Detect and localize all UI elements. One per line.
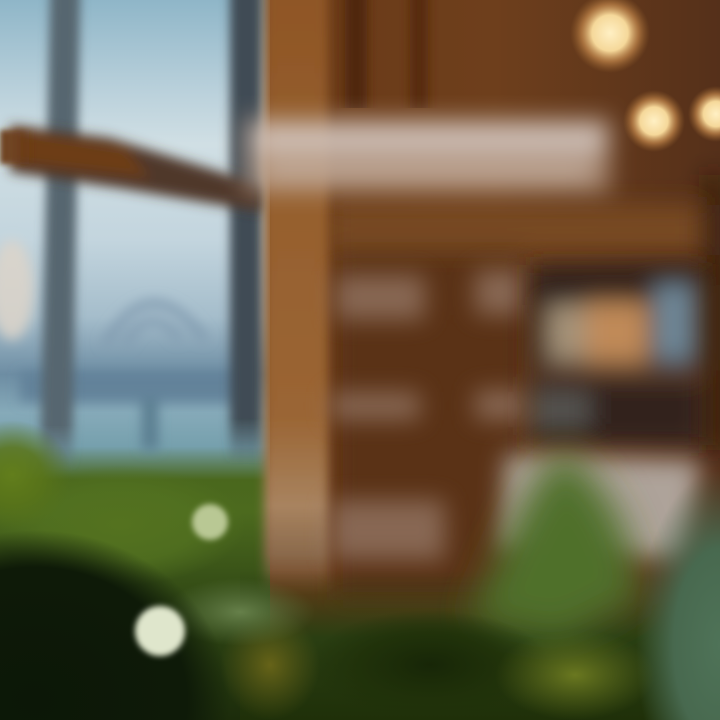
pillar xyxy=(264,0,328,595)
dark wood slats xyxy=(345,0,428,108)
window mullions xyxy=(40,0,262,472)
panel: wood wall xyxy=(270,0,720,720)
beam end at frame xyxy=(0,130,34,164)
wooden beam xyxy=(10,125,262,212)
distant bridge and skyline xyxy=(0,240,240,450)
pale floor/furniture xyxy=(500,455,700,560)
bookshelf xyxy=(530,265,702,445)
lamps xyxy=(570,0,720,152)
blurred text columns xyxy=(330,270,525,560)
panel: window with sky xyxy=(0,0,290,480)
bokeh highlights xyxy=(135,504,228,656)
lawn behind window base xyxy=(0,400,280,720)
lighter ledge and panel xyxy=(330,175,720,600)
plants foreground xyxy=(0,420,720,720)
blurred title block xyxy=(245,118,610,192)
